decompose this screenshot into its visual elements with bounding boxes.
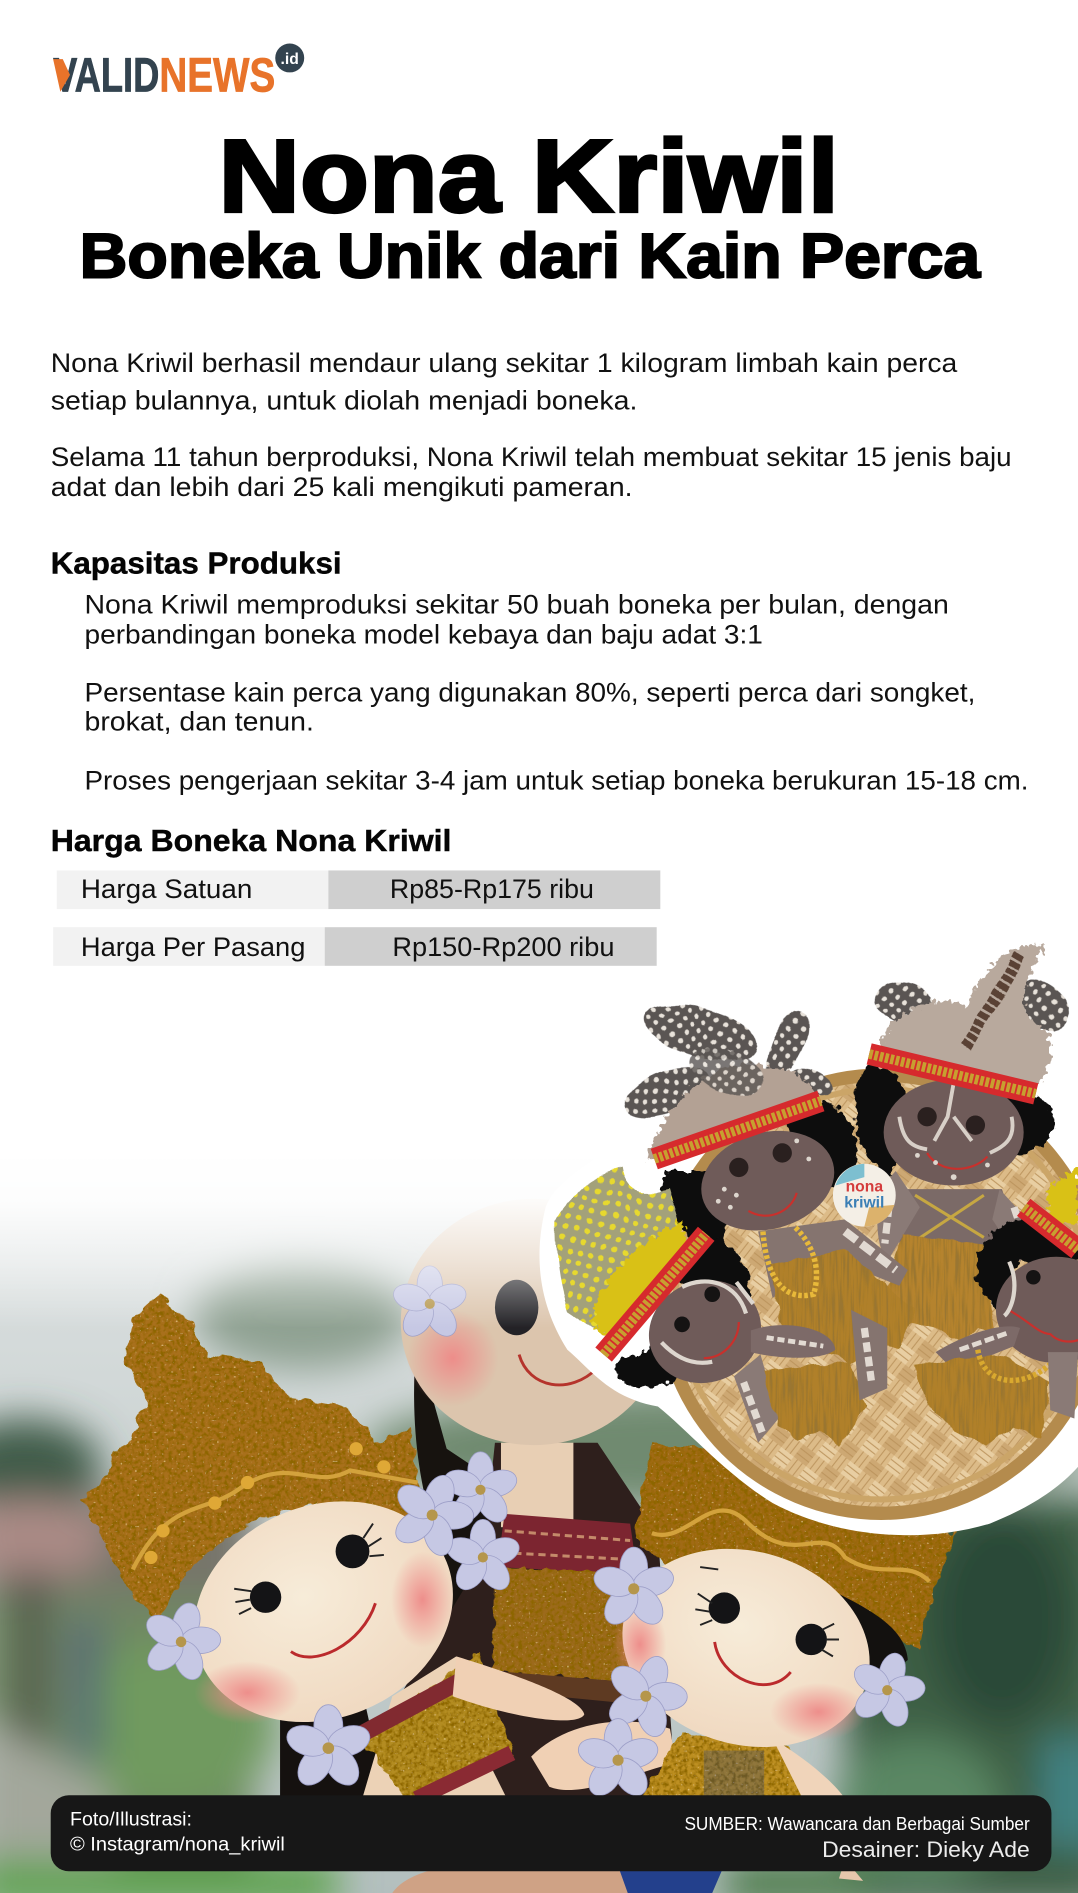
photo background: blurred garden [0, 1159, 1078, 1893]
photo credit: © Instagram/nona_kriwil [70, 1835, 285, 1856]
right doll crown [634, 1443, 956, 1652]
production capacity text: Proses pengerjaan sekitar 3-4 jam untuk setiap boneka berukuran 15-18 cm. [85, 766, 1029, 796]
right front doll [531, 1443, 956, 1802]
yarn hair [975, 1219, 1078, 1310]
yarn hair [854, 1062, 1054, 1177]
right doll hair [821, 1591, 908, 1688]
row: unit price: Harga Satuan [81, 874, 252, 904]
grass skirt [884, 1234, 996, 1342]
headband [1024, 1207, 1078, 1250]
headband [654, 1101, 821, 1159]
back doll head [390, 1199, 666, 1445]
production capacity text: perbandingan boneka model kebaya dan baju adat 3:1 [85, 619, 763, 649]
title [80, 118, 981, 292]
production capacity text: Nona Kriwil memproduksi sekitar 50 buah boneka per bulan, dengan [85, 589, 949, 619]
back doll flowers [441, 1452, 523, 1595]
leg [1048, 1352, 1078, 1419]
arm [936, 1326, 1020, 1370]
logo: VALID [53, 49, 159, 103]
left doll flowers [131, 1461, 487, 1792]
basket [655, 1068, 1078, 1520]
row: unit price [57, 870, 660, 909]
production capacity text: brokat, dan tenun. [85, 706, 314, 736]
heading: production capacity: Kapasitas Produksi [51, 547, 342, 580]
photo credit: Foto/Illustrasi: [70, 1809, 192, 1830]
intro text block: Selama 11 tahun berproduksi, Nona Kriwil telah membuat sekitar 15 jenis baju [51, 442, 1012, 472]
yellow feathers [555, 1169, 690, 1346]
back doll hair [414, 1340, 519, 1720]
lower right doll [913, 1165, 1078, 1446]
intro text block: setiap bulannya, untuk diolah menjadi boneka. [51, 385, 637, 415]
left doll body and sash [360, 1652, 584, 1804]
row: pair price: Rp150-Rp200 ribu [392, 932, 614, 962]
white fade over top of photo [0, 1147, 1078, 1328]
bead necklace [978, 1350, 1053, 1380]
head [996, 1257, 1078, 1363]
grass skirt [770, 1250, 915, 1364]
white sticker outline [539, 932, 1078, 1535]
badge: nona [846, 1179, 883, 1196]
intro text block: Nona Kriwil berhasil mendaur ulang sekitar 1 kilogram limbah kain perca [51, 348, 958, 378]
arm and body [751, 1325, 835, 1358]
left doll crown [82, 1295, 425, 1620]
head [634, 1265, 776, 1399]
heading: price: Harga Boneka Nona Kriwil [51, 825, 451, 858]
price table [53, 870, 660, 966]
production capacity text: Persentase kain perca yang digunakan 80%, seperti perca dari songket, [85, 677, 975, 707]
lower left doll [555, 1169, 887, 1446]
legs [851, 1310, 887, 1400]
source and designer [684, 1814, 1030, 1862]
bead necklace [763, 1227, 816, 1296]
yellow feather [1048, 1165, 1078, 1225]
footer bar [51, 1795, 1051, 1871]
intro text block: adat dan lebih dari 25 kali mengikuti pameran. [51, 472, 633, 502]
grass skirt [913, 1355, 1050, 1446]
feathers [869, 944, 1078, 1087]
logo: .id [281, 51, 299, 68]
feathers [619, 994, 836, 1161]
yarn hair [662, 1101, 857, 1246]
row: pair price [53, 927, 657, 966]
right doll face [599, 1520, 893, 1775]
back doll [338, 1199, 676, 1799]
row: unit price: Rp85-Rp175 ribu [390, 874, 594, 904]
torso and arm [758, 1219, 908, 1298]
row: pair price: Harga Per Pasang [81, 932, 305, 962]
headband [869, 1054, 1036, 1094]
right doll flowers [575, 1547, 935, 1802]
badge [833, 1164, 896, 1227]
source and designer: SUMBER: Wawancara dan Berbagai Sumber [684, 1814, 1030, 1834]
hand and batik below footer [392, 1858, 863, 1893]
sticker: woven basket with Papuan dolls [539, 932, 1078, 1535]
back doll body [338, 1443, 676, 1799]
grass skirt [763, 1362, 867, 1446]
back doll woven sash [497, 1514, 637, 1574]
right doll body [531, 1722, 845, 1799]
left doll face [161, 1463, 486, 1760]
logo: NEWS [159, 49, 275, 103]
headband [604, 1234, 706, 1355]
photo credit [70, 1809, 285, 1856]
torso [899, 1189, 1020, 1268]
yarn hair [616, 1239, 751, 1387]
left front doll [82, 1295, 584, 1804]
title: Nona Kriwil [218, 118, 839, 233]
badge: kriwil [844, 1194, 884, 1211]
upper left doll [619, 994, 915, 1364]
production capacity text [85, 589, 1029, 796]
head [690, 1117, 846, 1245]
upper right doll [854, 944, 1078, 1342]
head [884, 1079, 1024, 1186]
left doll hair behind [280, 1690, 386, 1799]
logo [53, 43, 304, 103]
source and designer: Desainer: Dieky Ade [822, 1837, 1030, 1862]
title: Boneka Unik dari Kain Perca [80, 222, 981, 292]
intro text block [51, 348, 1012, 502]
